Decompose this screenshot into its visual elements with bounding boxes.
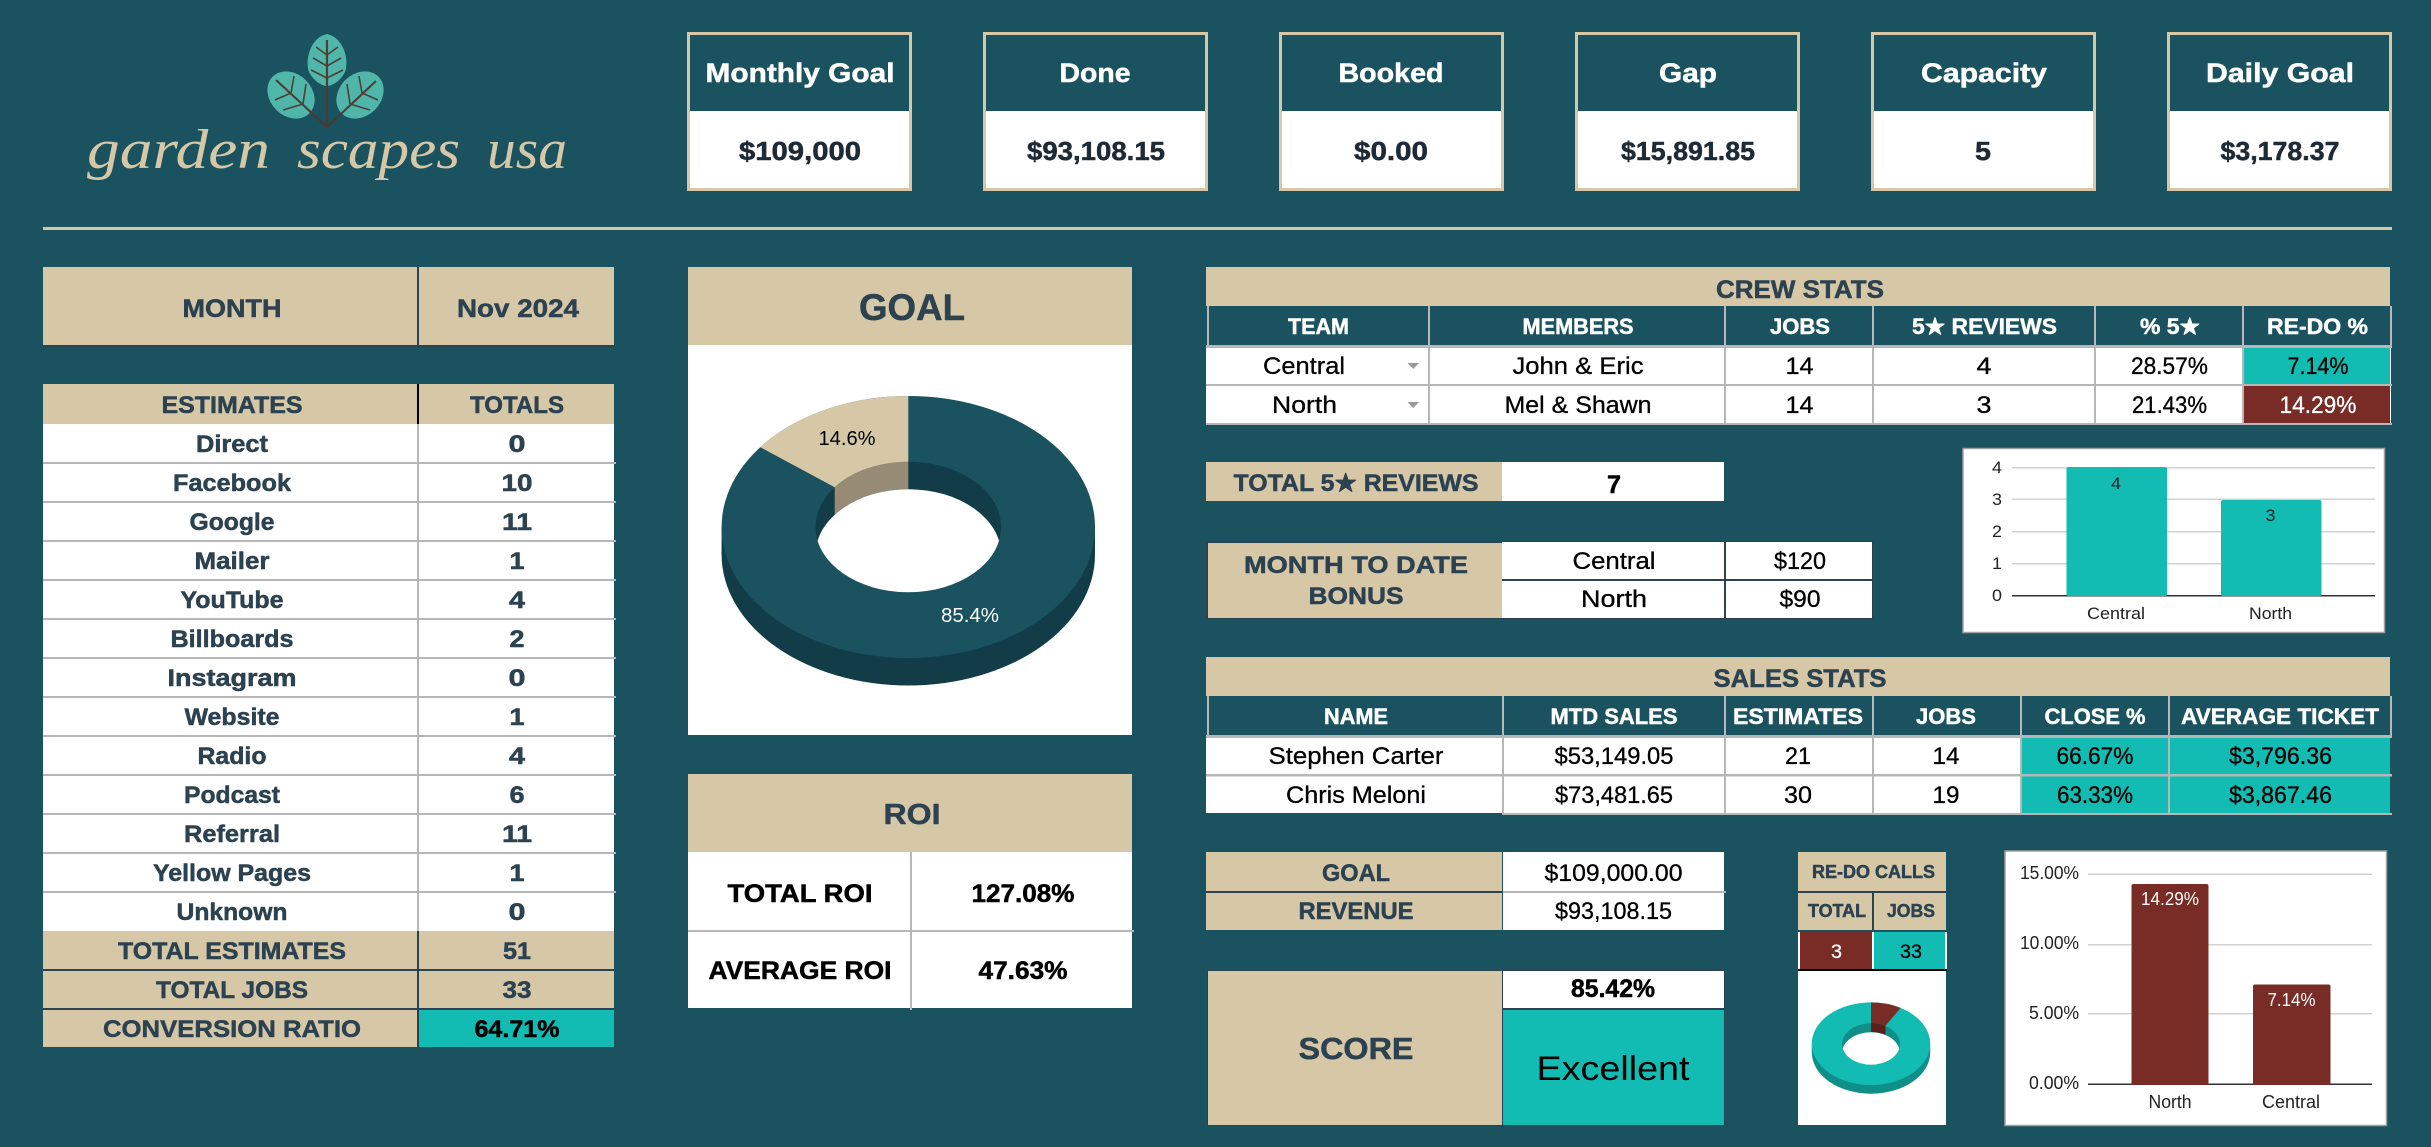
row: Revenue: REVENUE xyxy=(1298,898,1414,925)
crew header row: TEAM xyxy=(1288,314,1349,339)
row: Instagram: 0 xyxy=(508,665,526,692)
panel: ROI xyxy=(688,774,1134,1010)
row: YouTube: 4 xyxy=(509,587,526,614)
x axis labels: Central xyxy=(2262,1092,2320,1112)
row: Yellow Pages xyxy=(153,860,524,887)
row: Google: 11 xyxy=(502,509,532,536)
bar: Central: 4 xyxy=(2111,474,2121,493)
logo wordmark: usa xyxy=(487,119,567,181)
row: Total ROI: TOTAL ROI xyxy=(728,880,872,908)
panel: re-do calls xyxy=(1798,852,1947,1125)
panel: goal xyxy=(688,267,1132,735)
sales row: Chris Meloni xyxy=(1286,782,2332,809)
sales row: Stephen Carter: 14 xyxy=(1932,743,1960,770)
row: Mailer: 1 xyxy=(510,548,524,575)
x axis labels: North xyxy=(2249,604,2292,623)
row: Billboards xyxy=(170,626,524,653)
crew row: Central: John & Eric xyxy=(1512,353,1644,380)
card: Capacity: Capacity xyxy=(1921,58,2047,88)
y axis labels: 0.00% xyxy=(2029,1073,2079,1093)
table header: ESTIMATES xyxy=(162,392,302,419)
card: Done: $93,108.15 xyxy=(1027,136,1165,166)
panel: total 5-star reviews: TOTAL 5★ REVIEWS xyxy=(1234,470,1478,497)
heading: GOAL: GOAL xyxy=(859,287,965,328)
chart: re-do donut xyxy=(1812,1002,1930,1094)
crew row: Central: 14 xyxy=(1786,353,1814,380)
y axis labels: 4 xyxy=(1992,458,2002,477)
row: Unknown: Unknown xyxy=(176,899,288,926)
row: Conversion Ratio xyxy=(103,1016,560,1043)
row: Average ROI: 47.63% xyxy=(978,957,1068,985)
row: Total Jobs: 33 xyxy=(502,977,532,1004)
panel: score: 85.42% xyxy=(1571,975,1655,1003)
crew row: North: 14 xyxy=(1786,392,1814,419)
row: Instagram: Instagram xyxy=(168,665,296,692)
row: Total Estimates: TOTAL ESTIMATES xyxy=(118,938,346,965)
row: Goal: GOAL xyxy=(1322,860,1390,887)
card: Monthly Goal: Monthly Goal xyxy=(706,58,894,88)
chart: goal donut: 14.6% xyxy=(818,428,876,450)
card: Done xyxy=(984,34,1206,190)
crew row: North: North xyxy=(1272,392,1337,419)
row: Average ROI: AVERAGE ROI xyxy=(708,957,892,985)
KPI cards xyxy=(688,34,2390,190)
panel: score xyxy=(1207,970,1725,1126)
bar: Central xyxy=(2253,984,2330,1085)
x axis labels: North xyxy=(2148,1092,2192,1112)
card: Daily Goal xyxy=(2168,34,2390,190)
crew row: Central xyxy=(1263,353,2348,380)
row: Referral xyxy=(184,821,532,848)
panel: month selector: MONTH xyxy=(182,295,282,323)
bar: North xyxy=(2221,500,2322,596)
sales header row: NAME xyxy=(1324,704,1388,729)
row: Website xyxy=(184,704,524,731)
sales row: Stephen Carter: Stephen Carter xyxy=(1268,743,1444,770)
sales row: Chris Meloni: 30 xyxy=(1784,782,1812,809)
row: Unknown: 0 xyxy=(508,899,526,926)
panel: goal and revenue xyxy=(1206,852,1726,930)
row: Facebook xyxy=(173,470,532,497)
row: Yellow Pages: Yellow Pages xyxy=(153,860,311,887)
row: Website: 1 xyxy=(510,704,524,731)
y axis labels xyxy=(2020,863,2079,1093)
crew row: North: 14.29% xyxy=(2280,392,2356,419)
y axis labels: 5.00% xyxy=(2029,1003,2079,1023)
row: Podcast xyxy=(184,782,524,809)
row: YouTube xyxy=(180,587,526,614)
sales row: Stephen Carter xyxy=(1268,743,2332,770)
y axis labels: 15.00% xyxy=(2020,863,2079,883)
y axis labels xyxy=(1992,458,2002,605)
panel: re-do calls: 3 xyxy=(1831,942,1842,963)
panel: month to date bonus: North xyxy=(1581,586,1647,613)
x axis labels xyxy=(2087,604,2292,623)
row: Referral: 11 xyxy=(502,821,532,848)
crew row: Central: 4 xyxy=(1976,353,1992,380)
crew header row: RE-DO % xyxy=(2267,314,2368,339)
panel: re-do calls: 33 xyxy=(1900,942,1922,963)
row: Revenue: $93,108.15 xyxy=(1555,898,1672,925)
panel: crew stats xyxy=(1206,267,2392,425)
row: Google xyxy=(190,509,532,536)
card: Daily Goal: $3,178.37 xyxy=(2220,136,2340,166)
panel: month to date bonus: $120 xyxy=(1774,548,1826,575)
row: Direct: Direct xyxy=(196,431,268,458)
chart: goal donut: 85.4% xyxy=(941,605,999,627)
heading: CREW STATS: CREW STATS xyxy=(1716,276,1884,304)
heading: ROI: ROI xyxy=(884,799,940,831)
table header: TOTALS xyxy=(470,392,564,419)
crew header row xyxy=(1288,314,2368,339)
row: Facebook: 10 xyxy=(502,470,532,497)
table header xyxy=(162,392,564,419)
row: Goal: $109,000.00 xyxy=(1544,860,1682,887)
logo wordmark: scapes xyxy=(297,119,460,181)
row: Website: Website xyxy=(184,704,280,731)
panel: month to date bonus: BONUS xyxy=(1308,583,1404,610)
chart: 5-star reviews by team xyxy=(1963,448,2384,632)
card: Booked xyxy=(1280,34,1502,190)
sales row: Stephen Carter: 21 xyxy=(1785,743,1811,770)
row: Total Jobs xyxy=(156,977,532,1004)
sales row: Stephen Carter: $3,796.36 xyxy=(2229,743,2332,770)
row: Total Estimates xyxy=(118,938,531,965)
icon: three leaves xyxy=(258,34,393,128)
row: Instagram xyxy=(168,665,526,692)
sales row: Stephen Carter: 66.67% xyxy=(2056,743,2134,770)
y axis labels: 10.00% xyxy=(2020,933,2079,953)
sales header row: MTD SALES xyxy=(1550,704,1678,729)
panel: total 5-star reviews xyxy=(1206,462,1724,501)
row: Yellow Pages: 1 xyxy=(510,860,524,887)
panel: sales stats xyxy=(1206,657,2392,815)
row: Average ROI xyxy=(708,957,1068,985)
row: Unknown xyxy=(176,899,526,926)
sales header row: JOBS xyxy=(1916,704,1976,729)
row: Podcast: Podcast xyxy=(184,782,280,809)
row: Radio: 4 xyxy=(509,743,526,770)
card: Monthly Goal: $109,000 xyxy=(739,136,861,166)
card: Daily Goal: Daily Goal xyxy=(2206,58,2354,88)
row: Referral: Referral xyxy=(184,821,280,848)
sales header row: CLOSE % xyxy=(2044,704,2146,729)
card: Booked: Booked xyxy=(1338,58,1444,88)
panel: month to date bonus xyxy=(1206,541,1873,619)
panel: score: SCORE xyxy=(1298,1031,1414,1066)
sales row: Chris Meloni: $73,481.65 xyxy=(1555,782,1673,809)
crew header row: % 5★ xyxy=(2140,314,2200,339)
row: Goal xyxy=(1322,860,1682,887)
bar: Central: 7.14% xyxy=(2268,990,2316,1010)
row: Radio: Radio xyxy=(198,743,266,770)
sales row: Chris Meloni: Chris Meloni xyxy=(1286,782,1426,809)
card: Gap: Gap xyxy=(1659,58,1717,88)
row: Conversion Ratio: 64.71% xyxy=(474,1016,560,1043)
panel: total 5-star reviews: 7 xyxy=(1607,471,1621,499)
bar: North: 14.29% xyxy=(2141,889,2199,909)
bar: North: 3 xyxy=(2266,506,2276,525)
sales row: Chris Meloni: $3,867.46 xyxy=(2229,782,2332,809)
bar: Central xyxy=(2066,467,2167,596)
panel: month to date bonus: $90 xyxy=(1780,586,1820,613)
crew row: North: 3 xyxy=(1976,392,1992,419)
row: Google: Google xyxy=(190,509,274,536)
chart: re-do percent by team xyxy=(2005,851,2386,1126)
y axis labels: 0 xyxy=(1992,586,2002,605)
panel: month selector xyxy=(43,267,614,347)
card: Done: Done xyxy=(1060,58,1130,88)
row: Conversion Ratio: CONVERSION RATIO xyxy=(103,1016,361,1043)
crew row: North: 21.43% xyxy=(2132,392,2207,419)
panel: re-do calls: TOTAL xyxy=(1808,901,1866,921)
crew row: North: Mel & Shawn xyxy=(1504,392,1652,419)
row: Total Jobs: TOTAL JOBS xyxy=(156,977,308,1004)
x axis labels xyxy=(2148,1092,2320,1112)
card: Monthly Goal xyxy=(688,34,910,190)
y axis labels: 3 xyxy=(1992,490,2002,509)
bar: North xyxy=(2132,884,2208,1085)
panel: re-do calls: JOBS xyxy=(1887,901,1935,921)
crew header row: MEMBERS xyxy=(1522,314,1634,339)
y axis labels: 1 xyxy=(1992,554,2002,573)
panel: score: Excellent xyxy=(1536,1050,1690,1088)
panel: re-do calls: RE-DO CALLS xyxy=(1812,862,1935,882)
card: Capacity: 5 xyxy=(1975,136,1991,166)
row: Direct xyxy=(196,431,526,458)
sales row: Chris Meloni: 63.33% xyxy=(2057,782,2133,809)
row: Total ROI: 127.08% xyxy=(972,880,1074,908)
crew header row: 5★ REVIEWS xyxy=(1912,314,2057,339)
row: Revenue xyxy=(1298,898,1672,925)
row: Podcast: 6 xyxy=(510,782,524,809)
card: Gap: $15,891.85 xyxy=(1621,136,1755,166)
crew row: Central: 7.14% xyxy=(2288,353,2348,380)
row: Direct: 0 xyxy=(508,431,526,458)
card: Booked: $0.00 xyxy=(1354,136,1428,166)
row: Radio xyxy=(198,743,526,770)
crew header row: JOBS xyxy=(1770,314,1830,339)
row: Billboards: 2 xyxy=(510,626,524,653)
y axis labels: 2 xyxy=(1992,522,2002,541)
crew row: Central: Central xyxy=(1263,353,1345,380)
logo: garden scapes usa xyxy=(87,34,567,181)
logo wordmark xyxy=(87,119,567,181)
row: Total Estimates: 51 xyxy=(503,938,531,965)
chart: goal donut xyxy=(722,396,1095,686)
card: Capacity xyxy=(1872,34,2094,190)
row: Mailer: Mailer xyxy=(194,548,270,575)
card: Gap xyxy=(1576,34,1798,190)
row: YouTube: YouTube xyxy=(180,587,284,614)
crew row: North xyxy=(1272,392,2356,419)
x axis labels: Central xyxy=(2087,604,2145,623)
sales row: Chris Meloni: 19 xyxy=(1932,782,1960,809)
sales row: Stephen Carter: $53,149.05 xyxy=(1554,743,1674,770)
sales header row: ESTIMATES xyxy=(1733,704,1863,729)
panel: month selector: Nov 2024 xyxy=(457,295,579,323)
crew row: Central: 28.57% xyxy=(2131,353,2208,380)
panel: estimates table xyxy=(43,384,616,1047)
heading: SALES STATS: SALES STATS xyxy=(1714,665,1886,693)
row: Total ROI xyxy=(728,880,1074,908)
panel: month to date bonus: Central xyxy=(1572,548,1656,575)
row: Mailer xyxy=(194,548,524,575)
logo wordmark: garden xyxy=(87,119,270,181)
sales header row: AVERAGE TICKET xyxy=(2181,704,2380,729)
sales header row xyxy=(1324,704,2380,729)
panel: month to date bonus: MONTH TO DATE xyxy=(1244,552,1468,579)
row: Facebook: Facebook xyxy=(173,470,292,497)
row: Billboards: Billboards xyxy=(170,626,294,653)
